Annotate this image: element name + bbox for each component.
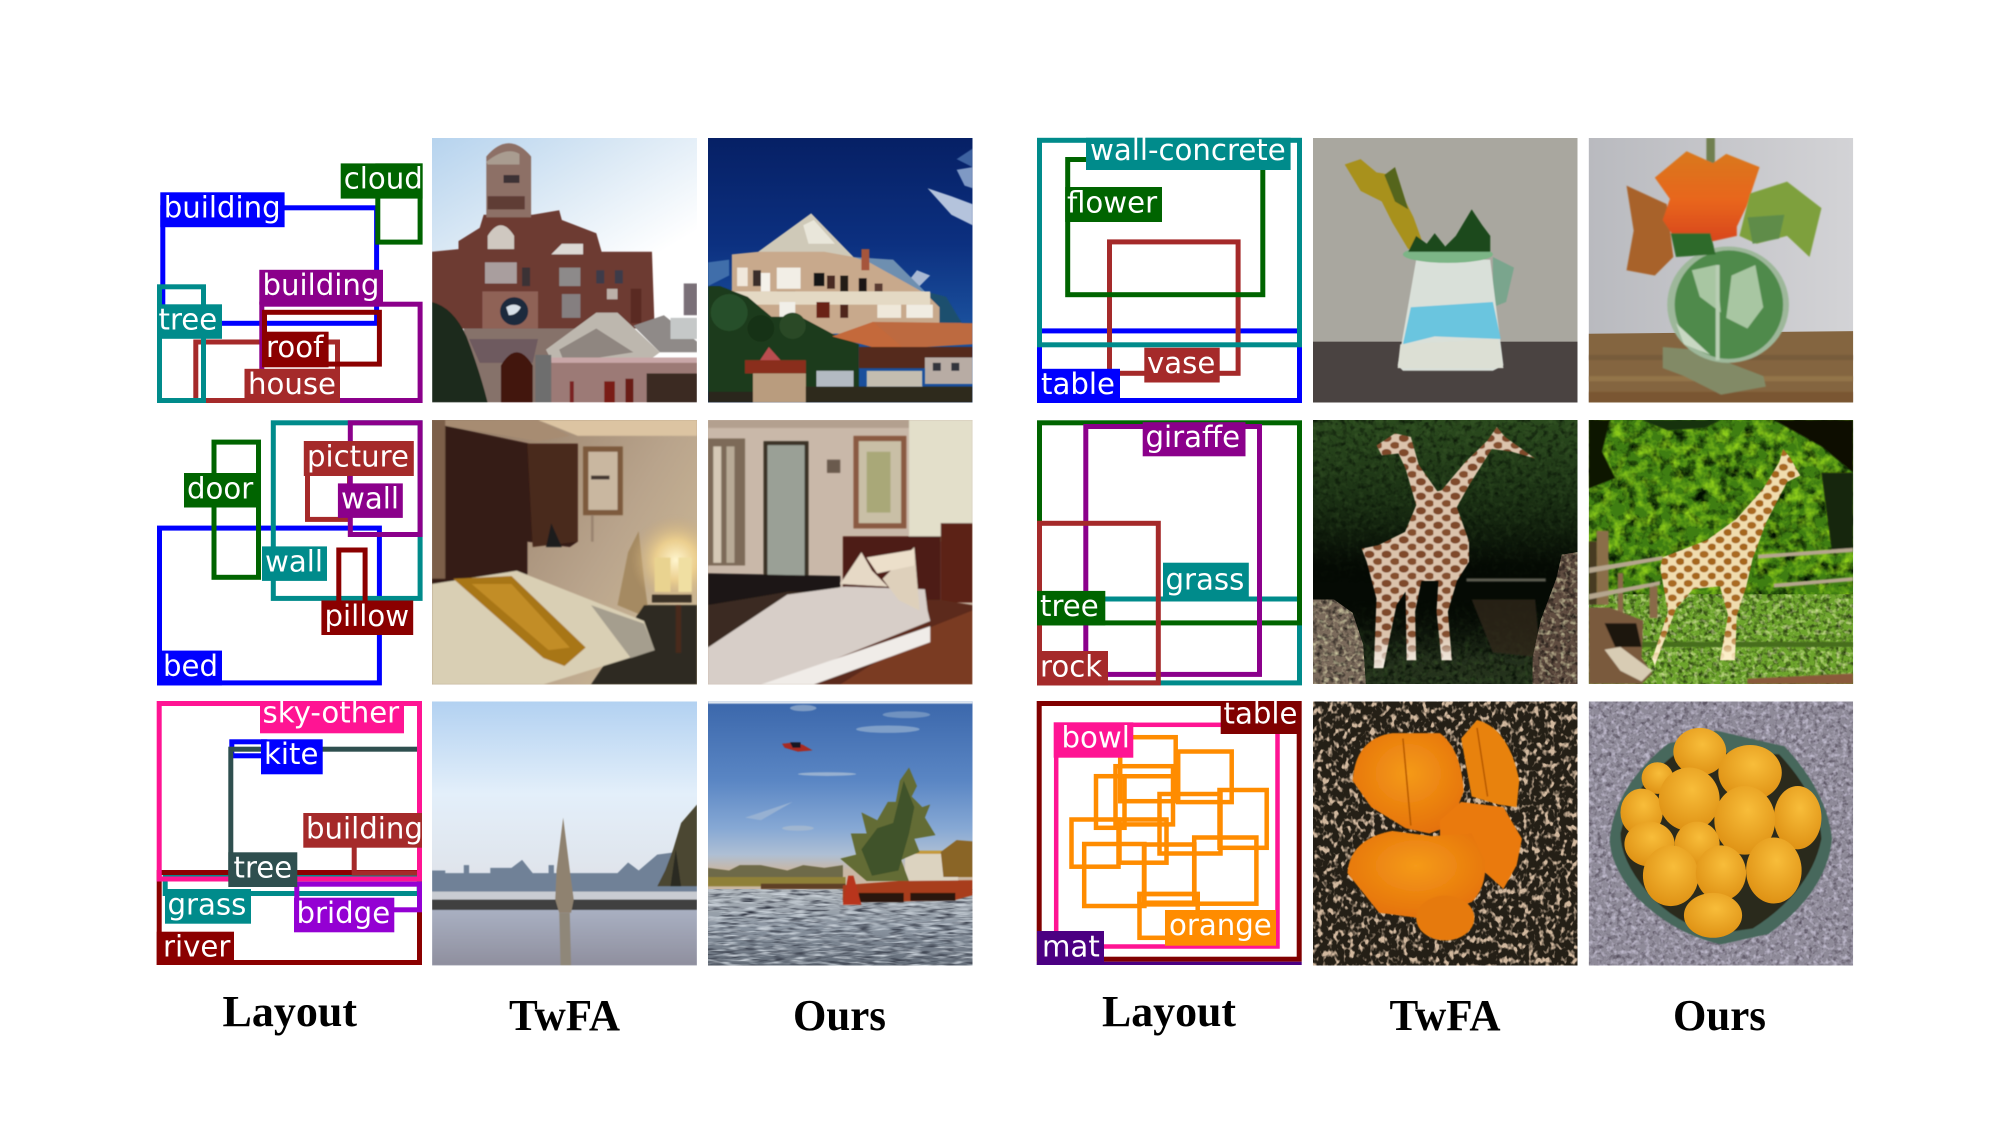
oranges: [1620, 728, 1821, 938]
label: building: building: [306, 811, 423, 845]
photo: Ours bedroom: [708, 420, 972, 684]
column heading: Layout right: Layout: [1102, 987, 1236, 1036]
label: wall teal: wall: [265, 545, 323, 579]
label: sky-other: sky-other: [262, 696, 399, 730]
label: tree: tree: [234, 851, 292, 885]
column heading: TwFA left: TwFA: [509, 991, 620, 1040]
label: building blue: building: [164, 191, 281, 225]
layout panel: lake scene: [157, 696, 423, 965]
label: table: table: [1224, 697, 1297, 731]
photo: Ours building: [708, 138, 972, 402]
label: roof: roof: [266, 330, 324, 364]
label: grass: grass: [1166, 562, 1244, 596]
layout panel: vase scene: [1037, 133, 1300, 403]
photo: Ours lake: [708, 702, 972, 966]
label: rock: rock: [1040, 649, 1102, 683]
photo: TwFA oranges: [1313, 702, 1578, 966]
label: cloud: cloud: [344, 162, 423, 196]
column heading: TwFA right: TwFA: [1390, 991, 1501, 1040]
label: wall purple: wall: [341, 482, 399, 516]
photo: TwFA bedroom: [432, 420, 697, 684]
label: river: river: [163, 929, 230, 963]
label: bridge: bridge: [296, 896, 390, 930]
label: bowl: bowl: [1062, 721, 1130, 755]
label: picture: picture: [307, 439, 409, 473]
label: pillow: pillow: [324, 599, 409, 633]
label: orange: orange: [1169, 908, 1272, 942]
orange boxes: [1072, 737, 1267, 938]
label: giraffe: giraffe: [1146, 420, 1240, 454]
label: wall-concrete: wall-concrete: [1090, 133, 1286, 167]
label: bed: bed: [163, 649, 218, 683]
layout panel: bedroom scene: [157, 423, 420, 685]
label: vase: vase: [1147, 346, 1215, 380]
photo: TwFA building: [432, 138, 697, 402]
column heading: Ours right: Ours: [1673, 991, 1766, 1040]
label: building purple: building: [262, 268, 379, 302]
layout panel: building scene: [157, 162, 423, 403]
label: door: door: [187, 471, 253, 505]
label: grass: grass: [168, 887, 246, 921]
column heading: Layout left: Layout: [222, 987, 357, 1036]
photo: Ours oranges: [1588, 702, 1854, 966]
photo: TwFA lake: [432, 702, 697, 966]
label: house: house: [248, 367, 336, 401]
label: tree: tree: [158, 303, 217, 337]
label: flower: flower: [1067, 185, 1157, 219]
label: table: table: [1041, 367, 1115, 401]
photo: TwFA giraffes: [1313, 420, 1578, 684]
label: mat: mat: [1042, 929, 1100, 963]
column heading: Ours left: Ours: [793, 991, 886, 1040]
label: kite: kite: [264, 737, 318, 771]
photo: TwFA vase: [1313, 138, 1578, 402]
layout panel: giraffe scene: [1037, 420, 1300, 685]
layout panel: oranges scene: [1037, 697, 1302, 965]
photo: Ours vase: [1588, 138, 1854, 402]
photo: Ours giraffe: [1588, 420, 1854, 684]
label: tree: tree: [1040, 589, 1099, 623]
